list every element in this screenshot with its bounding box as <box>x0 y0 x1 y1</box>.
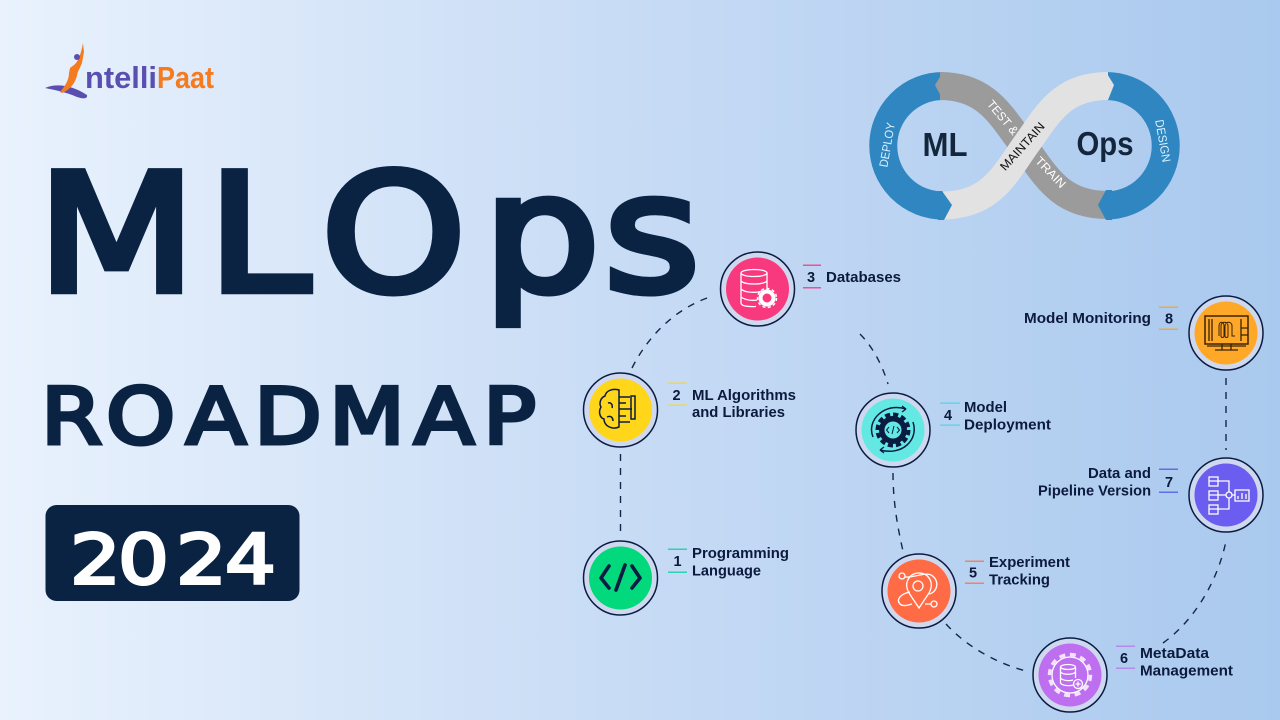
label: TEST &: TEST & <box>984 97 1021 138</box>
step 8: Model Monitoring <box>1024 296 1263 370</box>
diagram: MLOps infinity loop <box>876 72 1173 220</box>
step 2: ML Algorithms and Libraries <box>584 373 796 447</box>
step 6: MetaData Management: 6 <box>1120 651 1128 667</box>
icon: gear with cycle arrows <box>872 406 914 453</box>
step 2: ML Algorithms and Libraries: and Libraries <box>692 405 785 421</box>
step 6: MetaData Management: MetaData <box>1140 646 1210 662</box>
step 1: Programming Language <box>584 541 789 615</box>
step 4: Model Deployment: Model <box>964 400 1007 416</box>
subtitle: ROADMAP: ROADMAP <box>41 371 536 462</box>
step 7: Data and Pipeline Version: 7 <box>1165 475 1173 491</box>
step 5: Experiment Tracking: Tracking <box>989 572 1050 588</box>
icon: database with gear <box>741 270 776 308</box>
step 1: Programming Language: Programming <box>692 546 789 562</box>
label: Ops: Ops <box>1076 125 1134 162</box>
step 4: Model Deployment: Deployment <box>964 418 1051 434</box>
icon: code brackets <box>601 565 640 590</box>
label: DESIGN: DESIGN <box>1152 118 1173 163</box>
label: MAINTAIN: MAINTAIN <box>997 119 1048 173</box>
logo: Intellipaat: Paat <box>157 60 214 95</box>
step 1: Programming Language: Language <box>692 564 761 580</box>
step 2: ML Algorithms and Libraries: 2 <box>672 388 681 404</box>
icon: gear with database <box>1050 654 1090 696</box>
icon: pipeline flow chart <box>1209 477 1249 514</box>
step 3: Databases: Databases <box>826 270 901 286</box>
title: MLOps: MLOps <box>37 140 700 329</box>
step 4: Model Deployment <box>856 393 1051 467</box>
step 7: Data and Pipeline Version <box>1038 458 1263 532</box>
step 2: ML Algorithms and Libraries: ML Algorithms <box>692 388 796 404</box>
step 6: MetaData Management <box>1033 638 1233 712</box>
step 5: Experiment Tracking: 5 <box>969 566 977 582</box>
step 7: Data and Pipeline Version: Data and <box>1088 466 1151 482</box>
label: ML: ML <box>922 126 968 163</box>
step 3: Databases: 3 <box>807 270 815 286</box>
logo: Intellipaat: ntelli <box>85 60 157 95</box>
icon: brain circuit <box>600 389 635 428</box>
logo: Intellipaat <box>45 43 214 98</box>
connector: dashed path between steps <box>620 296 1226 671</box>
icon: monitor with chart <box>1205 316 1248 350</box>
label: DEPLOY: DEPLOY <box>876 121 898 168</box>
step 5: Experiment Tracking: Experiment <box>989 555 1070 571</box>
step 1: Programming Language: 1 <box>673 554 682 570</box>
step 7: Data and Pipeline Version: Pipeline Version <box>1038 484 1151 500</box>
step 5: Experiment Tracking <box>882 554 1070 628</box>
step 6: MetaData Management: Management <box>1140 664 1233 680</box>
year badge: 2024: 2024 <box>70 520 276 600</box>
step 3: Databases <box>720 252 901 326</box>
icon: location pin with route <box>898 573 937 608</box>
step 8: Model Monitoring: Model Monitoring <box>1024 311 1151 327</box>
year badge: 2024 <box>46 505 300 601</box>
step 4: Model Deployment: 4 <box>944 408 952 424</box>
label: TRAIN: TRAIN <box>1032 154 1069 191</box>
step 8: Model Monitoring: 8 <box>1165 312 1173 328</box>
